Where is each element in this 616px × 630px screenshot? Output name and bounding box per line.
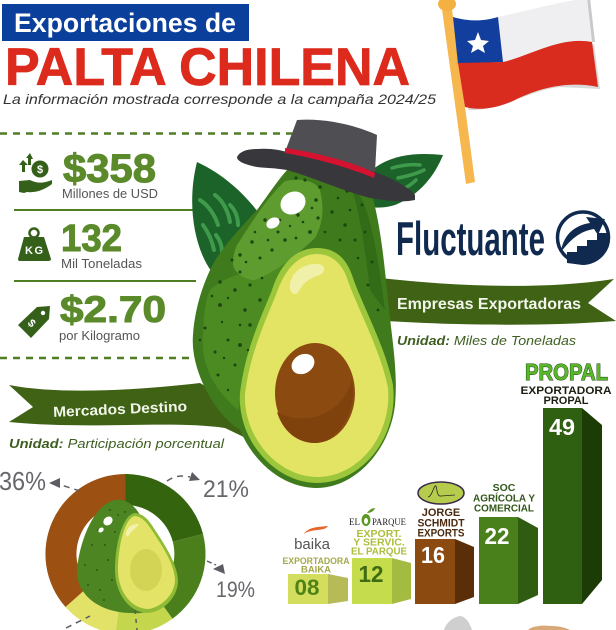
subtitle: La información mostrada corresponde a la campaña 2024/25 [3,91,436,107]
bar: Soc Agricola y Comercial 22: 22 [484,523,510,549]
bar: Exportadora Baika 08: EXPORTADORA [282,556,350,567]
banner: Mercados Destino: Mercados Destino [53,399,188,421]
icon: KG weight: KG [25,245,43,257]
note: unit, companies: Unidad: Miles de Toneladas [397,333,577,348]
bar: Export. y Servic. El Parque 12: PARQUE [372,517,406,527]
arrow: 36% [49,478,80,491]
bar: Soc Agricola y Comercial 22: AGRÍCOLA Y [473,492,535,504]
arrow: lower [135,610,137,630]
illustration: avocado with hat [192,120,443,488]
title: PALTA CHILENA: PALTA CHILENA [5,38,410,97]
arrow: 19% [207,561,225,574]
bar: Jorge Schmidt Exports 16 [415,482,474,604]
bar: Jorge Schmidt Exports 16: JORGE [422,507,460,519]
arrow: lower left [66,616,90,628]
bar: Exportadora Propal 49: PROPAL [543,395,589,407]
avocado flesh rim [240,248,394,483]
banner: Empresas Exportadoras: Empresas Exportadoras [397,296,581,313]
label: 21%: 21% [203,476,249,503]
stat label: Millones de USD: Millones de USD [62,186,158,201]
bar: Exportadora Baika 08: baika [294,536,331,553]
banner: Empresas Exportadoras [372,277,616,325]
segment: yellow-green [116,594,172,630]
leaf: left [192,162,258,272]
bar: Export. y Servic. El Parque 12: EL [349,517,360,527]
bar: Exportadora Baika 08: 08 [294,575,320,600]
bar: Exportadora Baika 08: BAIKA [301,564,331,576]
bar: Exportadora Baika 08 [282,526,350,604]
stat: 132: 132 [61,218,122,260]
bar: Export. y Servic. El Parque 12: EL PARQUE [351,546,407,558]
label: 36%: 36% [0,466,46,496]
segment: 36% [45,474,126,607]
bar: Exportadora Propal 49: EXPORTADORA [520,385,612,397]
icon: KG weight [18,228,51,261]
bar: Jorge Schmidt Exports 16: EXPORTS [418,528,464,540]
bar: Export. y Servic. El Parque 12: 12 [358,561,384,587]
banner: Mercados Destino [9,383,250,440]
bar: Soc Agricola y Comercial 22: SOC [493,482,516,494]
chart: exporter 3D bars [282,359,612,604]
bar: Jorge Schmidt Exports 16: SCHMIDT [418,518,465,530]
hat [237,120,415,201]
skin shine [264,187,310,231]
flesh highlight [290,264,324,294]
avocado pit [275,343,355,443]
stat label: por Kilogramo: por Kilogramo [59,328,140,343]
icon: rising arrow over steps [558,212,609,265]
bar: Export. y Servic. El Parque 12 [349,508,411,604]
bar: Export. y Servic. El Parque 12: Y SERVIC. [353,536,405,548]
note: unit, markets: Unidad: Participación porcentual [9,436,225,451]
segment: 19% [154,534,206,619]
icon: price tag [18,306,50,338]
arrow: 21% [167,472,200,481]
stat: $2.70: $2.70 [60,289,166,330]
label: 19%: 19% [216,577,255,602]
icon: hand with coin: $ [37,164,43,176]
stat label: Mil Toneladas: Mil Toneladas [61,256,142,271]
icon: hand with coin [19,153,52,193]
bar: Export. y Servic. El Parque 12: EXPORT. [357,528,402,540]
segment: yellow [66,586,119,630]
footer icons, cropped [444,616,570,630]
avocado skin [193,170,396,488]
illustration: small avocado [77,500,178,613]
bar: Jorge Schmidt Exports 16: 16 [421,542,445,568]
chart: destination markets donut [0,466,255,630]
bar: Soc Agricola y Comercial 22: COMERCIAL [474,502,535,514]
heading: Exportaciones de: Exportaciones de [14,8,236,38]
icon: Chilean flag [438,0,600,184]
leaf: right [370,154,443,208]
bar: Soc Agricola y Comercial 22 [473,482,538,604]
avocado flesh [245,254,388,477]
bar: Exportadora Propal 49 [520,359,612,604]
segment: 21% [126,474,203,542]
bar: Exportadora Propal 49: 49 [549,414,575,440]
avocado speckles [199,176,379,391]
stat: $358: $358 [63,147,156,191]
panel: key figures [0,134,292,358]
icon: price tag: $ [25,317,38,330]
